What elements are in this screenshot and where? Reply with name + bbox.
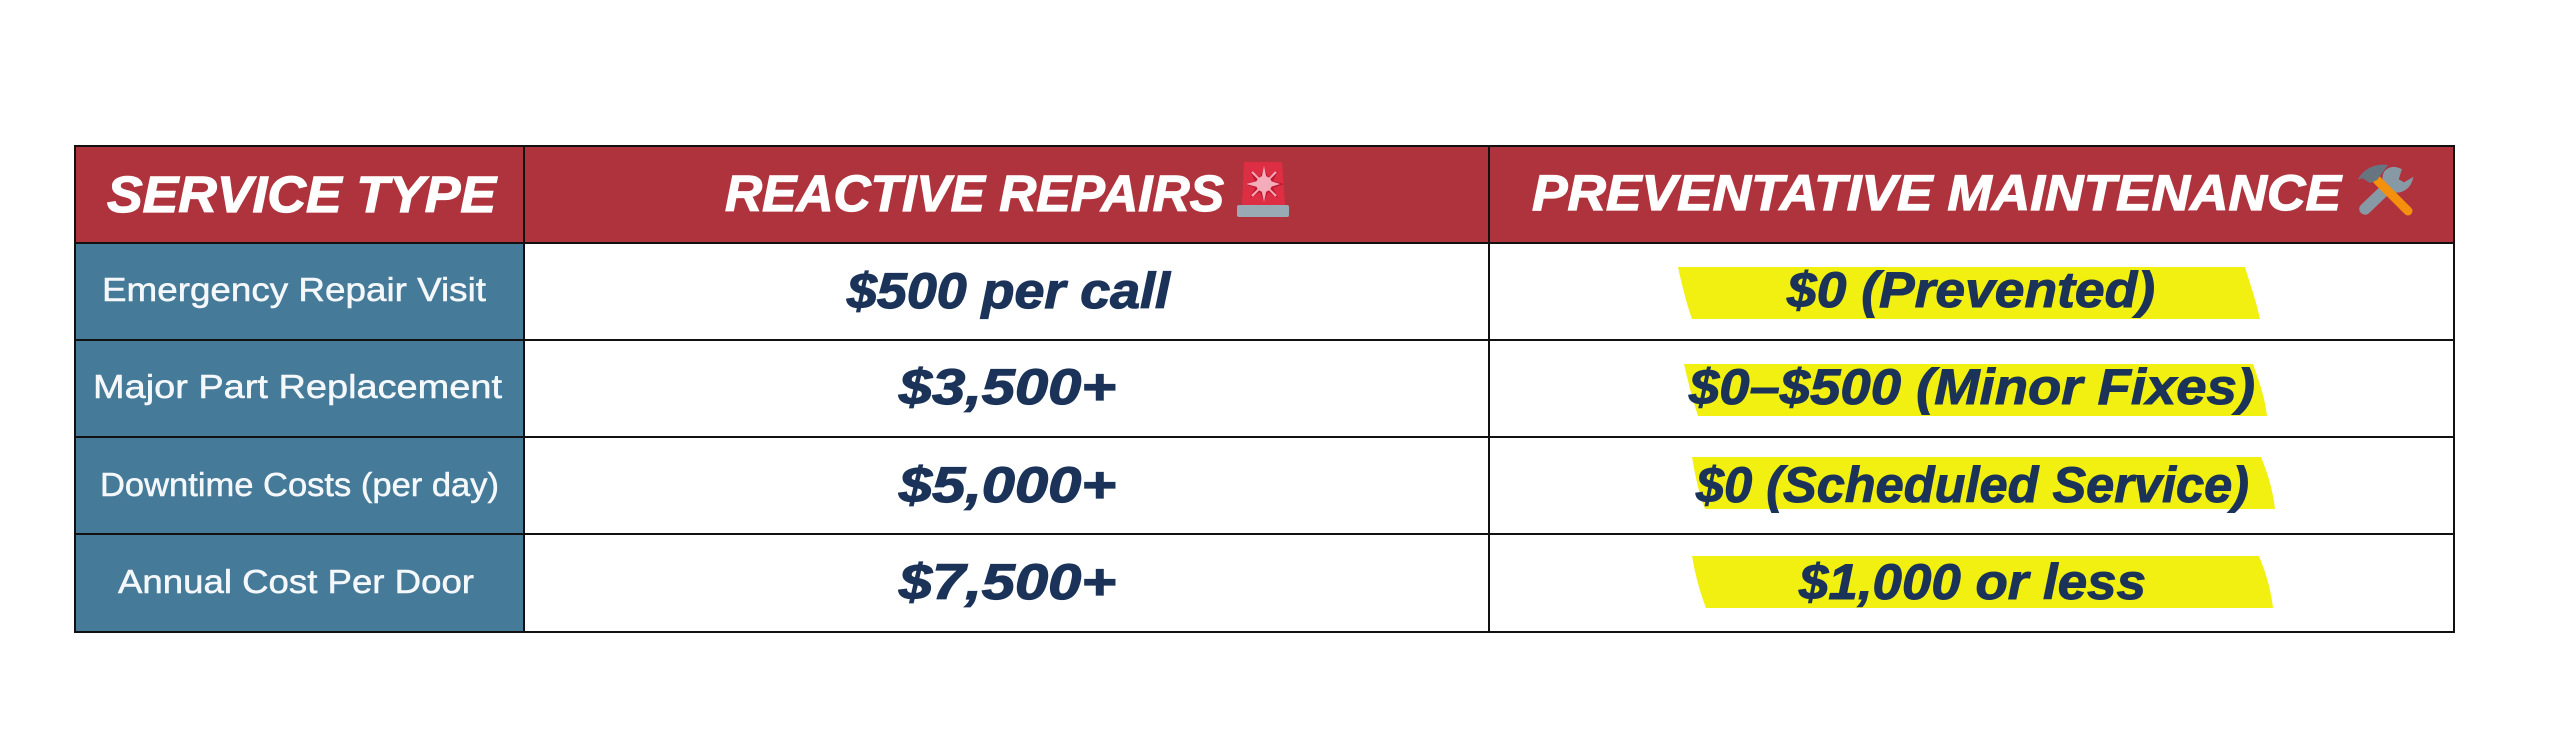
heading: reactive repairs: REACTIVE REPAIRS bbox=[725, 165, 1224, 222]
row 3: downtime costs bbox=[100, 457, 2275, 513]
heading: service type: SERVICE TYPE bbox=[107, 166, 498, 223]
icon: rotating siren bbox=[1237, 162, 1289, 217]
first column background bbox=[75, 243, 524, 632]
highlight: row 3 bbox=[1692, 457, 2275, 509]
row 4: annual cost per door: $7,500+ bbox=[898, 554, 1116, 610]
row 2: major part replacement: Major Part Replacement bbox=[93, 368, 502, 405]
row 1: emergency repair visit: $0 (Prevented) bbox=[1786, 262, 2155, 318]
row 2: major part replacement: $0–$500 (Minor Fixes) bbox=[1688, 359, 2255, 415]
table: service cost comparison bbox=[75, 146, 2454, 632]
row 3: downtime costs: $0 (Scheduled Service) bbox=[1695, 457, 2249, 513]
header row background bbox=[75, 146, 2454, 243]
row 2: major part replacement bbox=[93, 359, 2267, 416]
row 3: downtime costs: $5,000+ bbox=[898, 457, 1116, 513]
icon: hammer and wrench bbox=[2358, 165, 2411, 213]
highlight: row 2 bbox=[1684, 364, 2267, 416]
row 3: downtime costs: Downtime Costs (per day) bbox=[100, 466, 499, 503]
heading: preventative maintenance: PREVENTATIVE MAINTENANCE bbox=[1532, 165, 2343, 221]
row 1: emergency repair visit bbox=[102, 262, 2260, 319]
highlight: row 4 bbox=[1692, 556, 2273, 608]
row 4: annual cost per door: $1,000 or less bbox=[1798, 554, 2146, 610]
row 4: annual cost per door: Annual Cost Per Door bbox=[118, 563, 474, 600]
highlight: row 1 bbox=[1678, 267, 2260, 319]
row 1: emergency repair visit: $500 per call bbox=[846, 263, 1171, 319]
row 1: emergency repair visit: Emergency Repair Visit bbox=[102, 271, 486, 308]
row 2: major part replacement: $3,500+ bbox=[898, 359, 1116, 415]
row 4: annual cost per door bbox=[118, 554, 2273, 610]
